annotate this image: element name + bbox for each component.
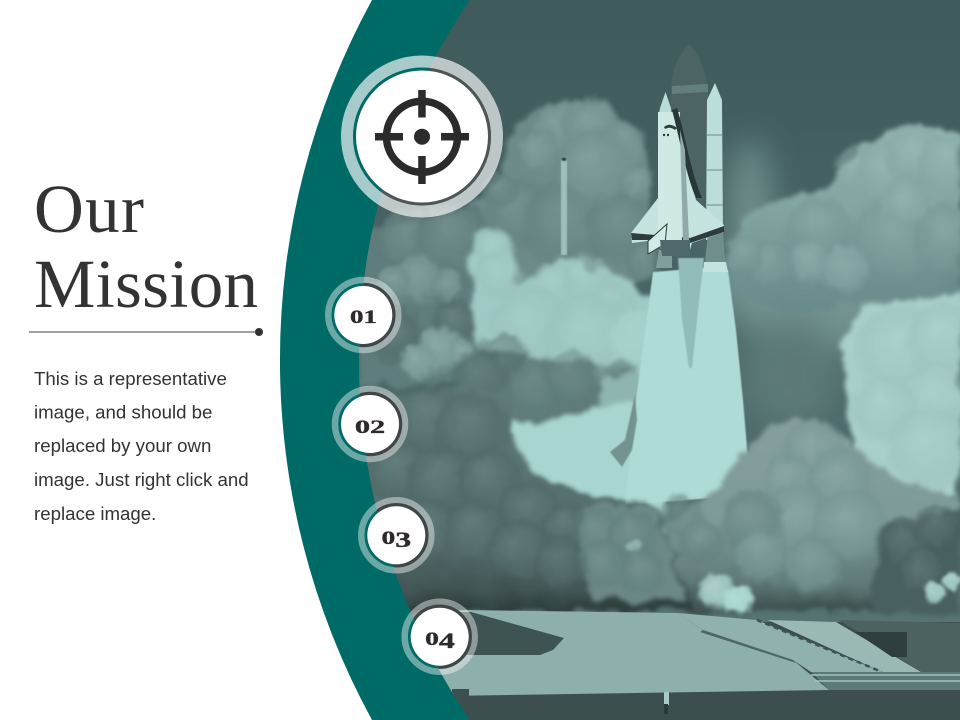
badge 04: [405, 602, 475, 672]
tower: [561, 158, 567, 255]
central light cloud base: [460, 228, 670, 510]
target badge: [347, 62, 497, 212]
teal arc band: [280, 0, 960, 720]
upper left clouds: [480, 94, 667, 284]
icon: crosshair target: [375, 90, 469, 184]
external tank: [671, 44, 708, 184]
booster engine bells: [705, 233, 725, 262]
badge 04: 0: [425, 629, 439, 650]
body text: [34, 368, 249, 524]
body text: image. Just right click and: [34, 469, 249, 490]
photo: shuttle launch: [350, 0, 960, 720]
badge 03: [361, 500, 431, 570]
right booster: [706, 83, 723, 240]
lower right smoke detail: [658, 417, 960, 599]
distant haze clouds: [715, 140, 960, 430]
gantry debris: [610, 395, 637, 467]
shuttle stack: [631, 44, 728, 272]
badge 03: 0: [381, 528, 395, 549]
divider with end dot: [29, 328, 263, 336]
badge 03: 3: [395, 528, 411, 552]
launch ramp: [400, 610, 960, 720]
left clouds: [378, 206, 476, 382]
badge 02: [335, 389, 405, 459]
badge 01: [328, 280, 398, 350]
bright exhaust gaps near ground: [696, 572, 960, 617]
title: [34, 171, 258, 322]
right clouds: [723, 122, 960, 495]
central light cloud detail: [456, 226, 641, 394]
title: Our: [34, 171, 144, 247]
body text: replace image.: [34, 503, 156, 524]
body text: image, and should be: [34, 402, 212, 422]
left booster: [659, 92, 672, 112]
body text: This is a representative: [34, 368, 227, 389]
main engines: [660, 240, 690, 256]
badge 04: 4: [439, 629, 455, 653]
tail fin: [648, 224, 667, 254]
body text: replaced by your own: [34, 435, 211, 456]
orbiter wings: [631, 140, 724, 250]
rocket exhaust columns: [625, 258, 751, 505]
right cloud bases: [840, 295, 960, 500]
badge 02: 02: [355, 417, 385, 437]
sky: [355, 0, 960, 720]
lower left smoke detail: [394, 392, 642, 586]
orbiter fuselage: [658, 112, 682, 240]
dark and grey smoke bases: [350, 392, 960, 612]
badge 01: 01: [350, 307, 377, 328]
cloud base masses upper: [360, 100, 960, 385]
title: Mission: [34, 246, 258, 322]
